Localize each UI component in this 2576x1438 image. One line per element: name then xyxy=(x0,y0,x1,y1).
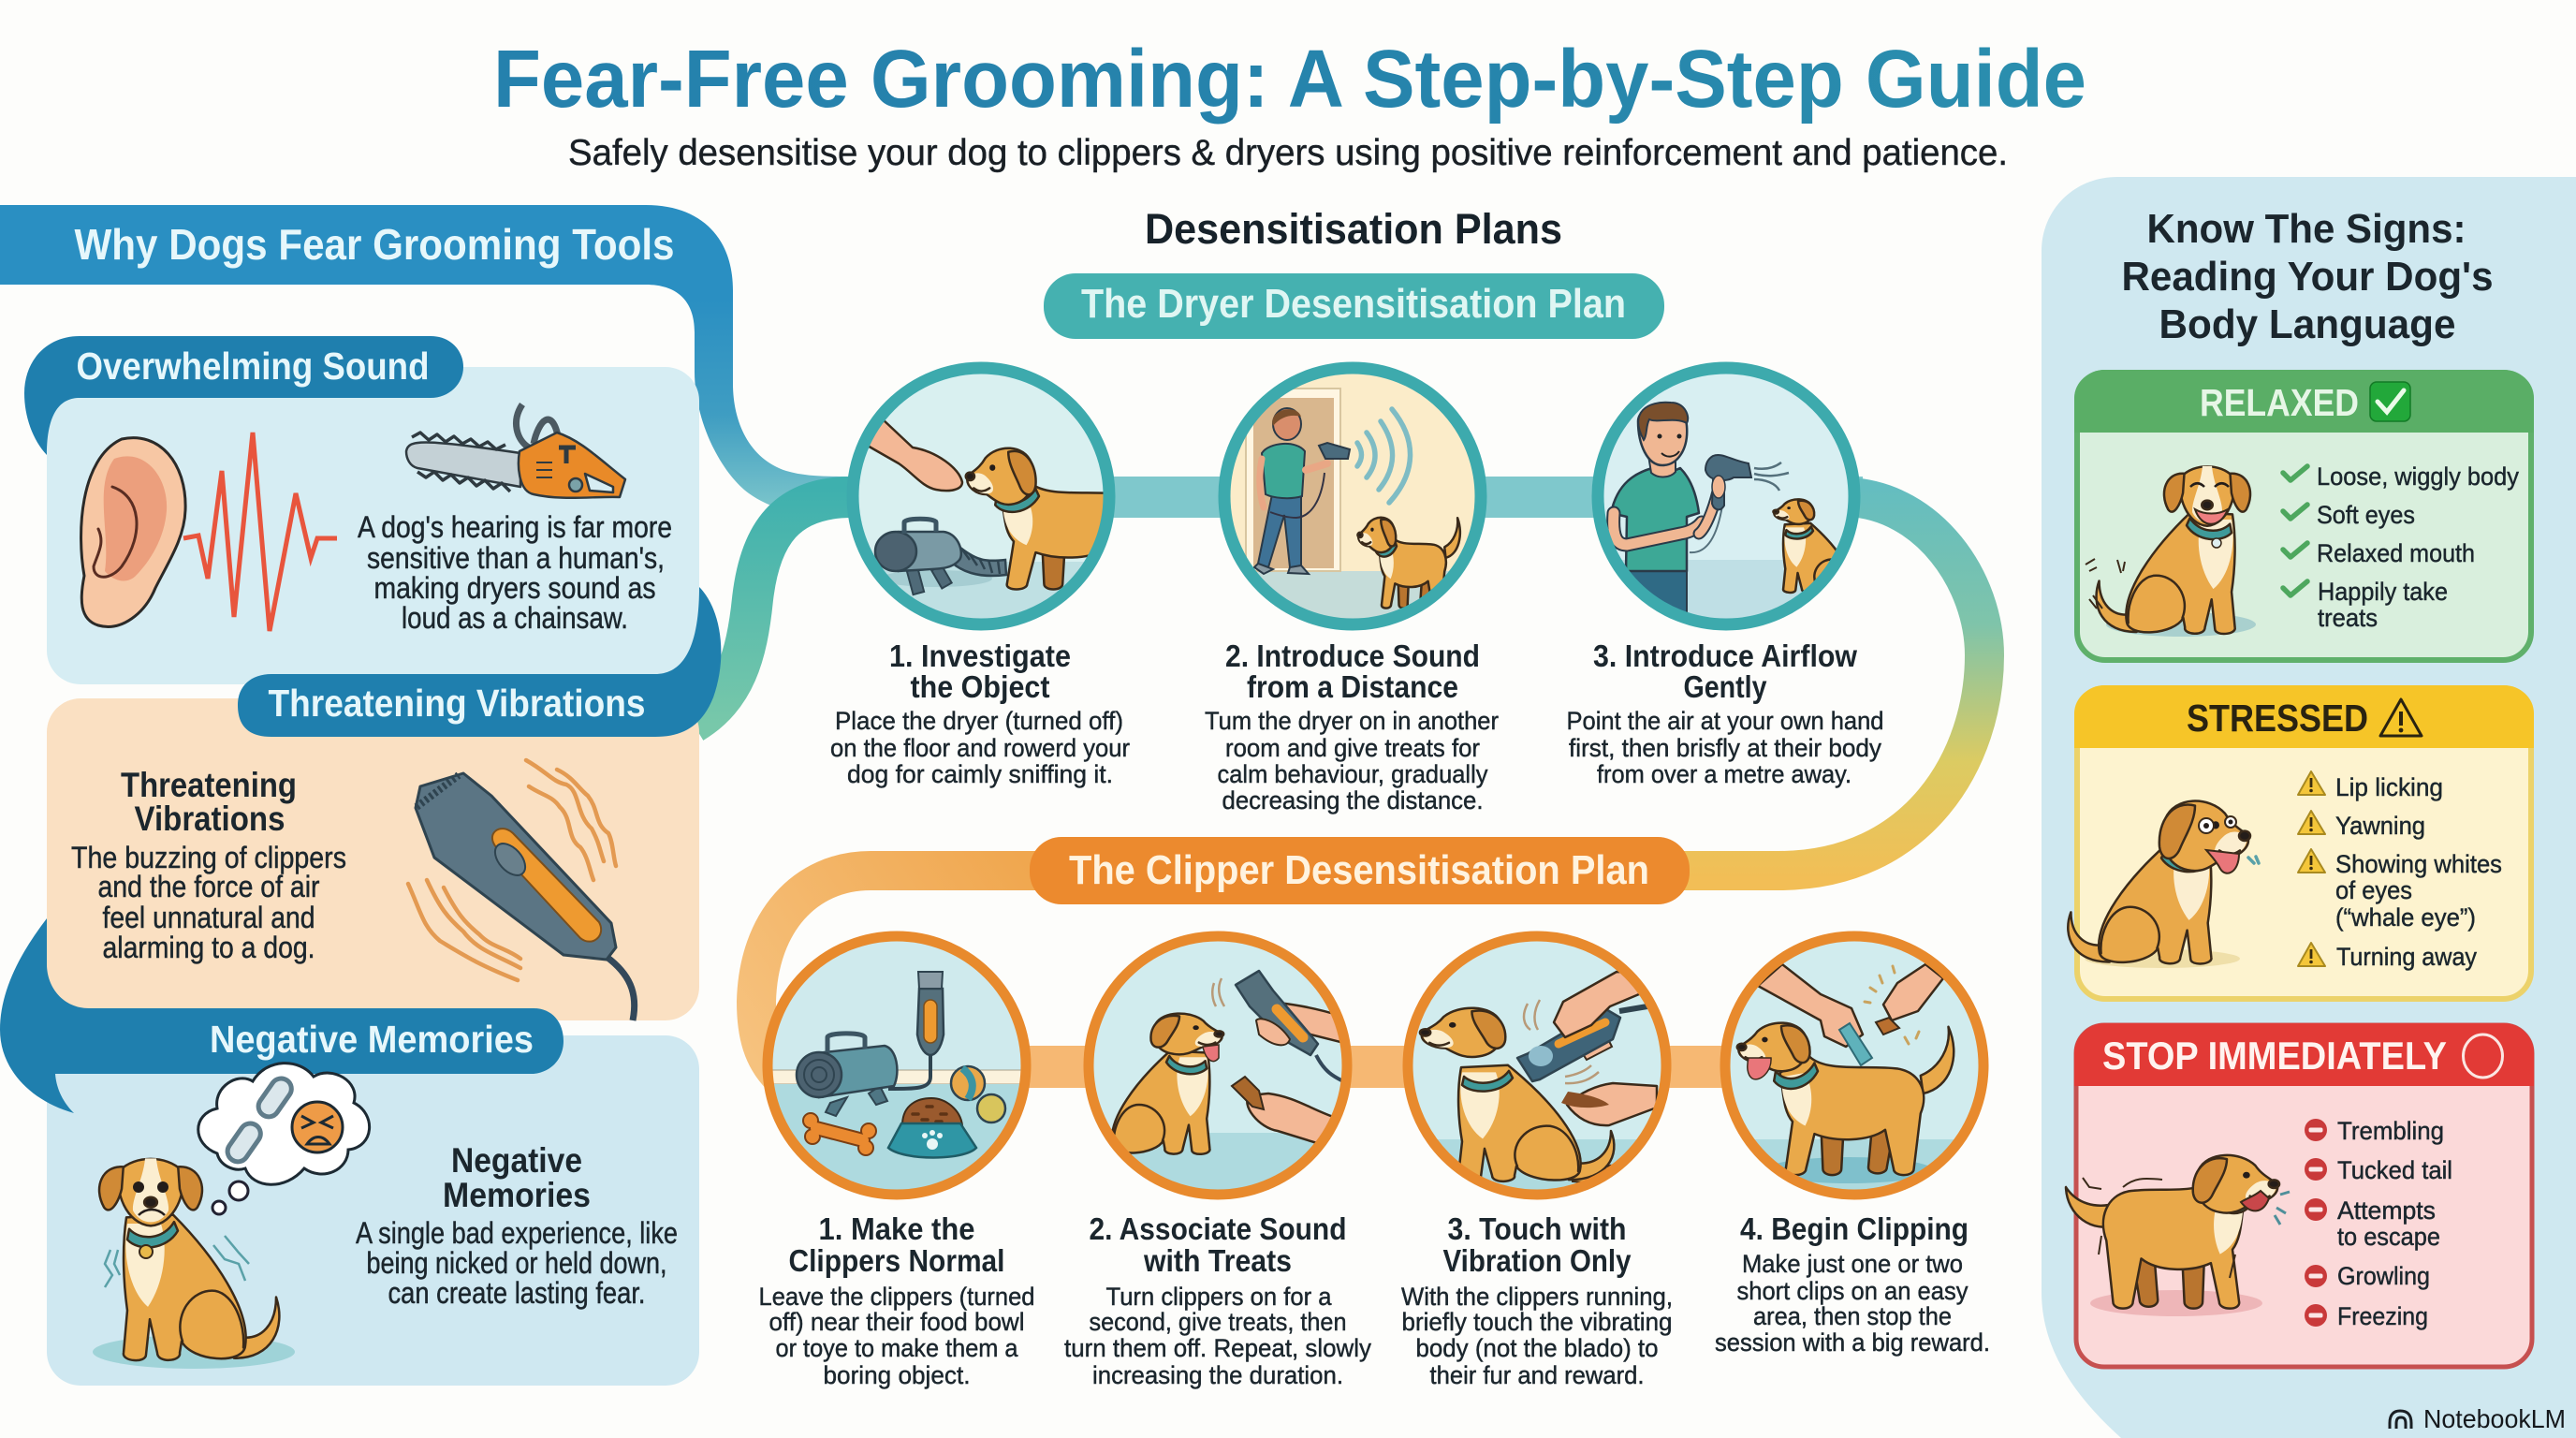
text: overwhelming sound body: A dog's hearing is far more xyxy=(358,510,672,544)
step text: clipper 3: body (not the blado) to xyxy=(1415,1334,1659,1362)
flow ribbon: teal row connector xyxy=(847,477,1863,518)
step text: clipper 3: With the clippers running, xyxy=(1401,1283,1673,1311)
heading: threatening vibrations xyxy=(121,766,297,838)
step circle: clipper 3 touch with vibration xyxy=(1399,932,1676,1205)
step text: clipper 4 xyxy=(1715,1211,1990,1357)
header text: relaxed: RELAXED xyxy=(2200,381,2359,424)
step text: clipper 3: their fur and reward. xyxy=(1430,1361,1644,1389)
step text: clipper 2: with Treats xyxy=(1143,1243,1292,1278)
icon: chainsaw xyxy=(406,404,625,498)
list: relaxed signs: Happily take xyxy=(2318,578,2448,606)
flow ribbon: blue header into dryer plan xyxy=(0,205,847,518)
list: stressed signs: Turning away xyxy=(2336,943,2477,971)
heading band text: Why Dogs Fear Grooming Tools xyxy=(75,220,674,269)
text: overwhelming sound body xyxy=(358,510,672,635)
heading: negative memories: Memories xyxy=(443,1176,591,1214)
step circle: clipper 1 make normal xyxy=(763,932,1034,1206)
tab label: negative memories: Negative Memories xyxy=(210,1018,534,1061)
icon: green check box xyxy=(2370,382,2410,421)
title: Fear-Free Grooming: A Step-by-Step Guide xyxy=(493,34,2086,125)
step text: dryer 3: from over a metre away. xyxy=(1597,760,1852,788)
list: stressed signs: Showing whites xyxy=(2335,850,2502,878)
step text: dryer 1: dog for caimly sniffing it. xyxy=(847,760,1113,788)
brand mark: NotebookLM: NotebookLM xyxy=(2423,1404,2566,1433)
illustration: stressed dog xyxy=(2068,801,2259,968)
step text: clipper 1: or toye to make them a xyxy=(775,1334,1018,1362)
list: stressed signs xyxy=(2298,771,2502,971)
tab label: threatening vibrations: Threatening Vibrations xyxy=(268,682,646,725)
flow ribbon: dryer plan to clipper plan xyxy=(1676,497,1984,871)
list: relaxed signs: treats xyxy=(2318,604,2378,632)
step circle: dryer 1 investigate xyxy=(848,361,1116,631)
pill: dryer plan xyxy=(1044,273,1664,339)
list: stop signs: Attempts xyxy=(2337,1196,2436,1225)
step text: dryer 1: on the floor and rowerd your xyxy=(830,734,1130,762)
step text: dryer 3: 3. Introduce Airflow xyxy=(1593,638,1857,673)
step text: clipper 1: Leave the clippers (turned xyxy=(758,1283,1035,1311)
header text: stop immediately: STOP IMMEDIATELY xyxy=(2102,1034,2447,1078)
list: stressed signs: Yawning xyxy=(2335,812,2425,840)
list: stop signs: Growling xyxy=(2337,1262,2430,1290)
step text: dryer 2: Tum the dryer on in another xyxy=(1205,707,1499,735)
step text: clipper 1: Clippers Normal xyxy=(788,1243,1005,1278)
heading: threatening vibrations: Vibrations xyxy=(135,800,285,838)
list: stressed signs: of eyes xyxy=(2335,876,2412,904)
text: threatening vibrations body xyxy=(71,841,346,964)
text: negative memories body: can create lasting fear. xyxy=(388,1276,646,1310)
step text: clipper 4: Make just one or two xyxy=(1742,1250,1963,1278)
card: negative memories xyxy=(0,918,699,1386)
list: stressed signs: (“whale eye”) xyxy=(2335,903,2476,932)
list: stop signs: Freezing xyxy=(2337,1302,2428,1330)
step text: clipper 3: briefly touch the vibrating xyxy=(1402,1308,1672,1336)
heading: threatening vibrations: Threatening xyxy=(121,766,297,804)
icon: clippers with vibration lines xyxy=(408,760,635,1020)
flow ribbon: orange row connector xyxy=(897,1046,1854,1088)
step text: dryer 1: Place the dryer (turned off) xyxy=(835,707,1123,735)
step text: dryer 3: first, then brisfly at their body xyxy=(1569,734,1881,762)
step text: clipper 4: session with a big reward. xyxy=(1715,1328,1990,1357)
text: negative memories body: A single bad experience, like xyxy=(356,1216,678,1250)
step text: dryer 3: Point the air at your own hand xyxy=(1567,707,1883,735)
step text: dryer 3: Gently xyxy=(1683,669,1767,704)
pill: clipper plan: The Clipper Desensitisation Plan xyxy=(1069,847,1649,893)
list: relaxed signs: Relaxed mouth xyxy=(2317,539,2475,567)
heading: desensitisation plans: Desensitisation Plans xyxy=(1145,205,1562,253)
list: stop signs: Tucked tail xyxy=(2337,1156,2452,1184)
step text: dryer 2: room and give treats for xyxy=(1225,734,1480,762)
flow ribbon: clipper pill down to first step xyxy=(756,871,1039,1077)
step text: clipper 3 xyxy=(1401,1211,1673,1389)
illustration: growling dog xyxy=(2066,1155,2290,1316)
step text: clipper 3: 3. Touch with xyxy=(1447,1211,1627,1246)
card: overwhelming sound xyxy=(24,336,699,684)
card: relaxed xyxy=(2074,370,2534,660)
panel: why dogs fear grooming tools xyxy=(0,220,721,1386)
text: negative memories body: being nicked or held down, xyxy=(367,1246,666,1280)
flow ribbon: teal branch behind vibrations card xyxy=(693,497,852,723)
step text: dryer 2: decreasing the distance. xyxy=(1222,786,1483,814)
tab: overwhelming sound xyxy=(24,336,463,455)
tab label: overwhelming sound: Overwhelming Sound xyxy=(77,345,429,388)
heading: know the signs: Reading Your Dog's xyxy=(2121,254,2494,300)
pill: dryer plan: The Dryer Desensitisation Plan xyxy=(1081,281,1626,327)
step text: dryer 1 xyxy=(830,638,1130,788)
icon: ear xyxy=(81,438,185,626)
step text: dryer 2: from a Distance xyxy=(1247,669,1458,704)
step circle: clipper 4 begin clipping xyxy=(1718,932,1994,1205)
step text: clipper 1 xyxy=(758,1211,1035,1389)
step text: dryer 3 xyxy=(1567,638,1883,788)
header: stop immediately xyxy=(2074,1023,2534,1086)
text: threatening vibrations body: and the force of air xyxy=(97,870,320,903)
icon: stop circle xyxy=(2464,1034,2503,1078)
step text: clipper 2: 2. Associate Sound xyxy=(1090,1211,1346,1246)
step text: clipper 2: Turn clippers on for a xyxy=(1106,1283,1332,1311)
heading: negative memories xyxy=(443,1141,591,1214)
step text: clipper 4: 4. Begin Clipping xyxy=(1740,1211,1969,1246)
heading: know the signs: Body Language xyxy=(2159,301,2456,347)
header text: stressed: STRESSED xyxy=(2187,697,2368,740)
list: stop signs xyxy=(2305,1117,2452,1330)
list: relaxed signs: Loose, wiggly body xyxy=(2317,462,2519,491)
illustration: scared dog xyxy=(93,1158,295,1369)
step text: dryer 2 xyxy=(1205,638,1499,814)
heading: know the signs: Know The Signs: xyxy=(2147,206,2466,252)
list: stressed signs: Lip licking xyxy=(2335,773,2443,801)
text: overwhelming sound body: loud as a chainsaw. xyxy=(402,601,628,635)
icon: warning triangle outline xyxy=(2380,699,2422,736)
step text: clipper 2: second, give treats, then xyxy=(1090,1308,1346,1336)
heading: negative memories: Negative xyxy=(451,1141,582,1180)
text: overwhelming sound body: making dryers sound as xyxy=(374,571,655,605)
list: stop signs: to escape xyxy=(2337,1223,2440,1251)
step text: clipper 3: Vibration Only xyxy=(1443,1243,1632,1278)
step text: clipper 1: boring object. xyxy=(824,1361,970,1389)
icon: thought cloud with broken chain and sad face xyxy=(198,1064,370,1214)
step text: clipper 2: increasing the duration. xyxy=(1092,1361,1343,1389)
heading: know the signs xyxy=(2121,206,2494,347)
list: relaxed signs xyxy=(2283,462,2519,632)
text: threatening vibrations body: feel unnatural and xyxy=(103,901,315,934)
tab: threatening vibrations xyxy=(238,587,721,737)
step text: dryer 1: 1. Investigate xyxy=(889,638,1071,673)
step text: clipper 4: short clips on an easy xyxy=(1737,1277,1969,1305)
illustration: happy dog xyxy=(2086,466,2256,637)
subtitle: Safely desensitise your dog to clippers & dryers using positive reinforcement and patience. xyxy=(568,133,2008,173)
icon: red sound wave xyxy=(183,433,337,631)
step text: clipper 1: 1. Make the xyxy=(818,1211,975,1246)
card: threatening vibrations xyxy=(47,587,721,1020)
card: stressed xyxy=(2068,685,2534,999)
text: threatening vibrations body: The buzzing of clippers xyxy=(71,841,346,874)
list: relaxed signs: Soft eyes xyxy=(2317,501,2415,529)
step text: clipper 4: area, then stop the xyxy=(1753,1302,1952,1330)
step text: clipper 1: off) near their food bowl xyxy=(769,1308,1024,1336)
card: stop immediately xyxy=(2066,1023,2534,1367)
text: overwhelming sound body: sensitive than a human's, xyxy=(367,541,665,575)
header: relaxed xyxy=(2074,370,2534,433)
step circle: dryer 3 airflow xyxy=(1591,360,1869,635)
text: negative memories body xyxy=(356,1216,678,1310)
panel: know the signs xyxy=(2042,177,2576,1438)
tab: negative memories xyxy=(0,918,564,1113)
text: threatening vibrations body: alarming to a dog. xyxy=(103,931,315,964)
step circle: dryer 2 sound from distance xyxy=(1217,360,1488,637)
pill: clipper plan xyxy=(1030,837,1690,904)
step text: dryer 2: calm behaviour, gradually xyxy=(1217,760,1488,788)
step text: dryer 1: the Object xyxy=(910,669,1050,704)
step text: dryer 2: 2. Introduce Sound xyxy=(1225,638,1480,673)
step text: clipper 2 xyxy=(1064,1211,1371,1389)
header: stressed xyxy=(2074,685,2534,748)
step circle: clipper 2 associate sound xyxy=(1081,932,1357,1203)
list: stop signs: Trembling xyxy=(2337,1117,2444,1145)
step text: clipper 2: turn them off. Repeat, slowly xyxy=(1064,1334,1371,1362)
